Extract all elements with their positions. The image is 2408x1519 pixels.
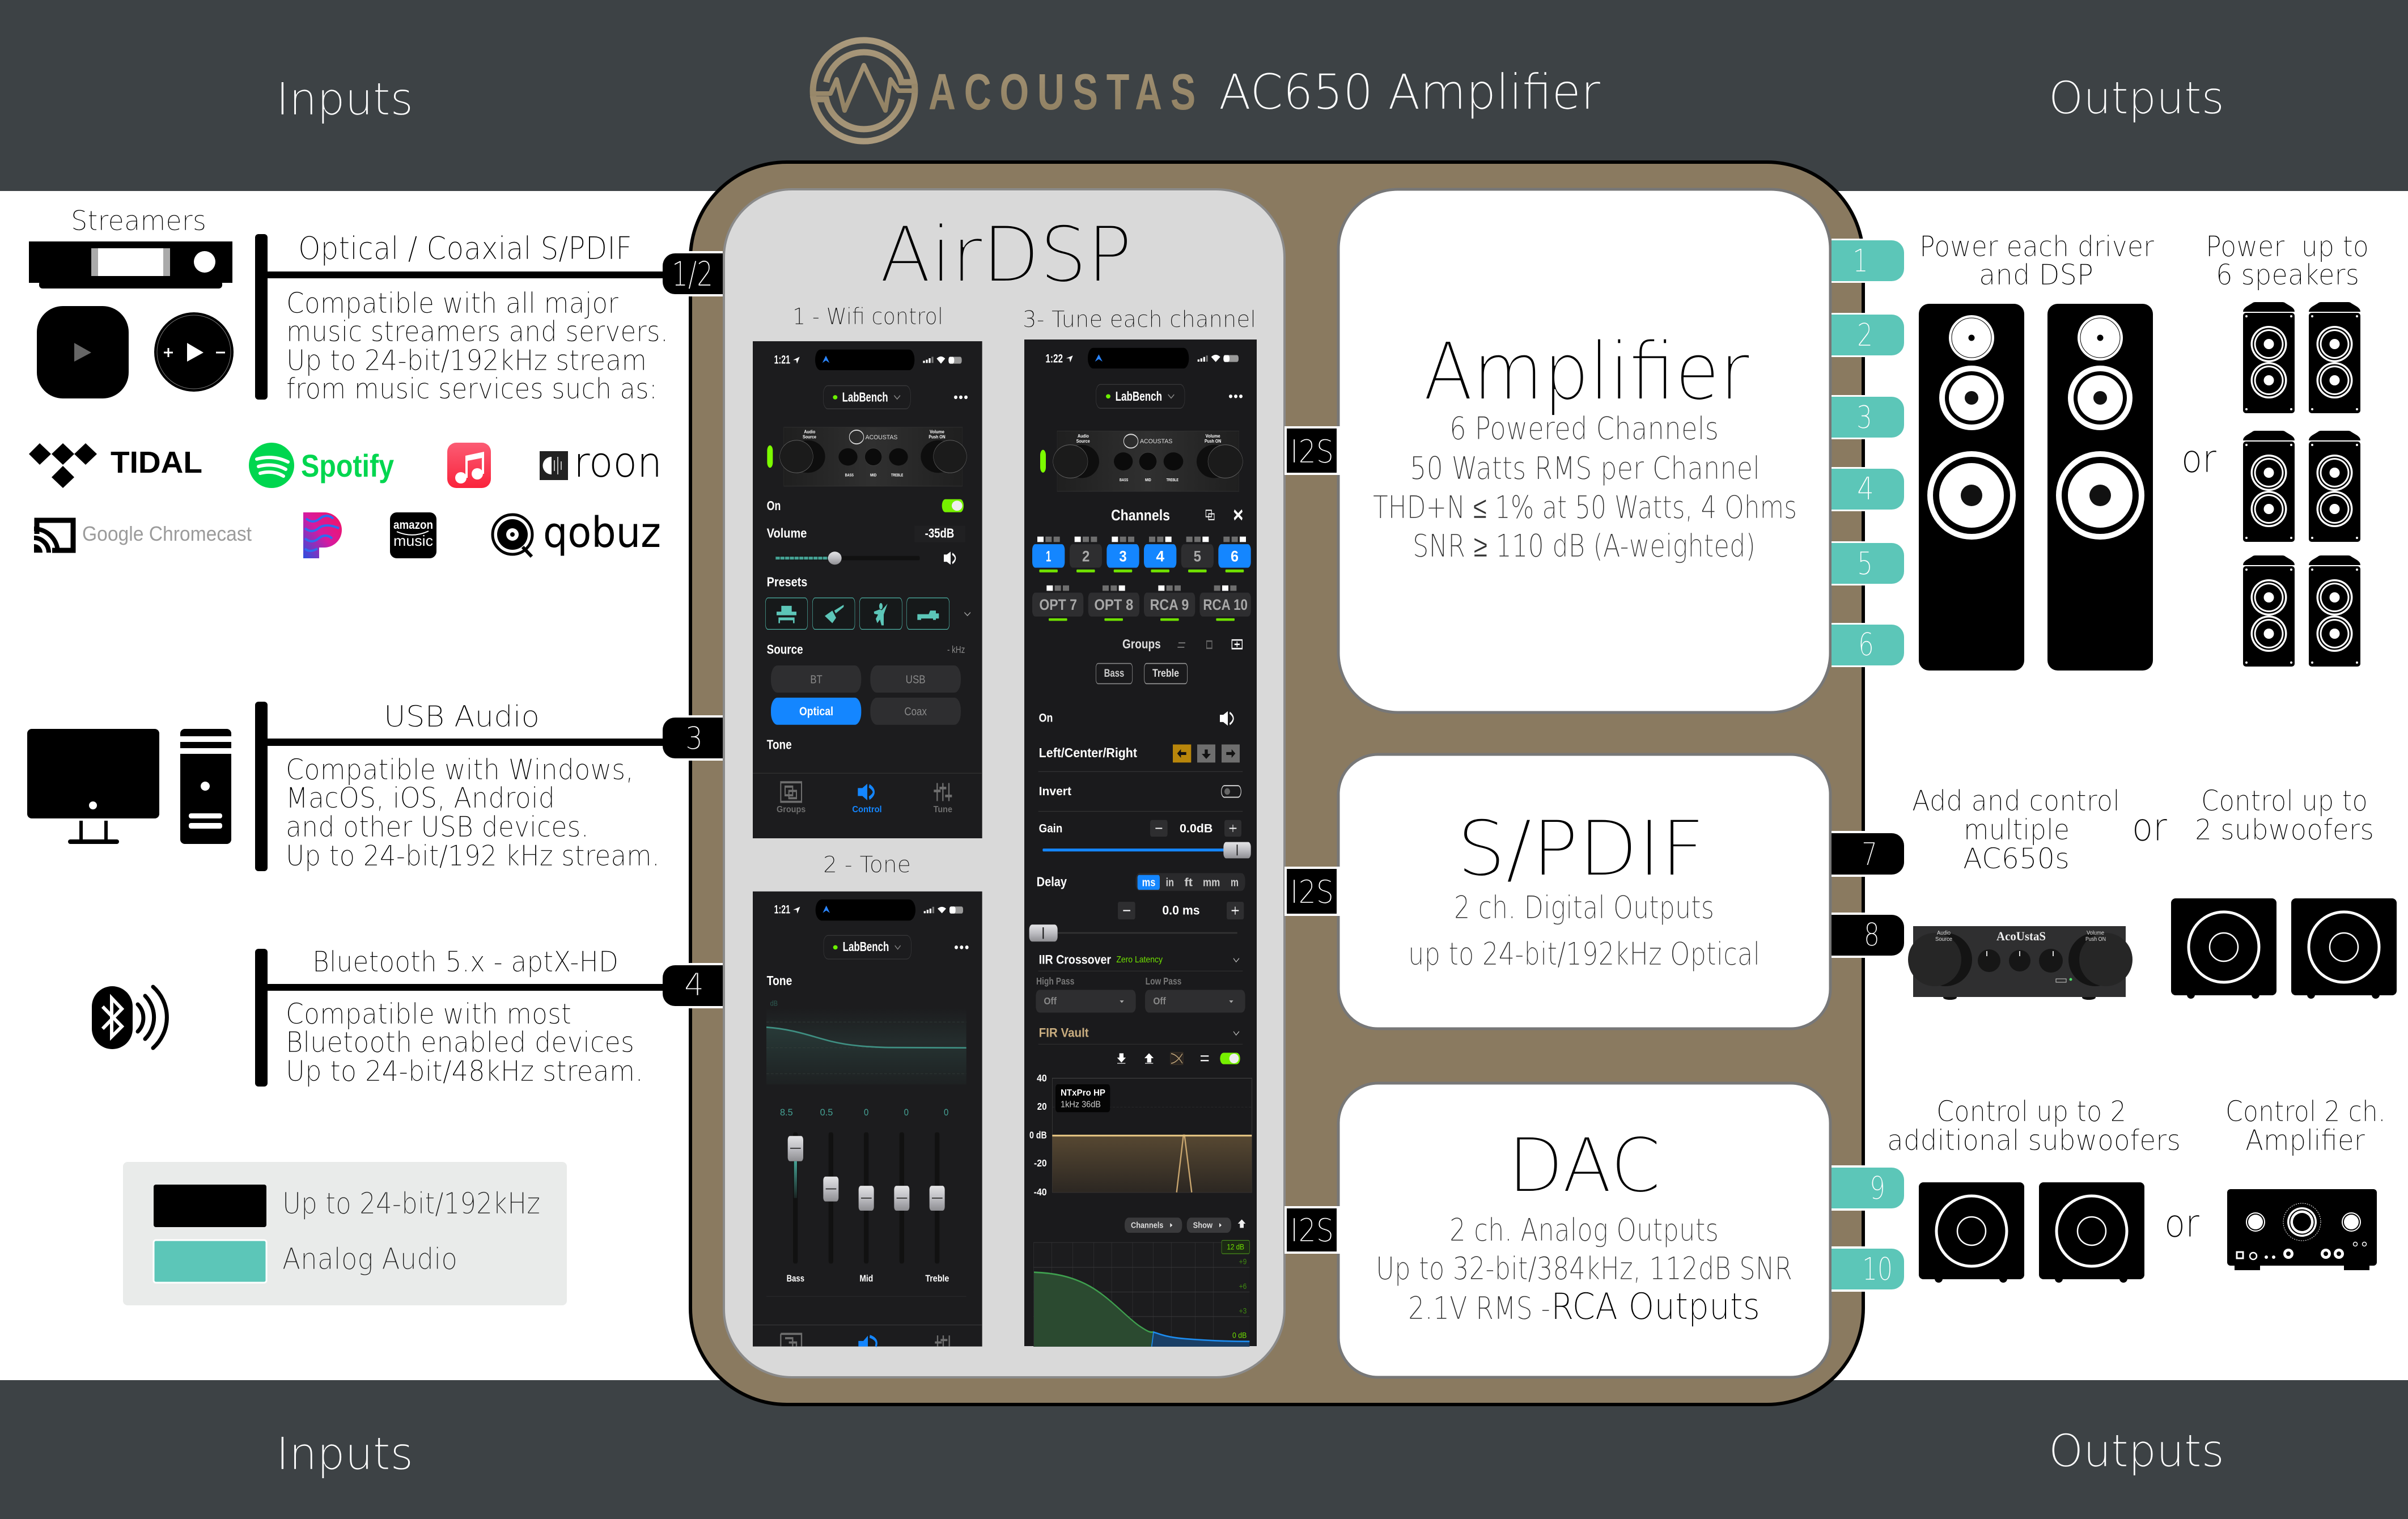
photo: AC650 amplifier front: AcoUstaS [1996, 929, 2046, 943]
phone 3 upper section [1032, 348, 1251, 891]
phone screen 1: wifi control [753, 341, 982, 838]
faders [788, 1132, 945, 1263]
preset buttons [765, 598, 949, 629]
phone 3 upper section: mm [1203, 876, 1220, 889]
spec lines: 2.1V RMS - [1408, 1290, 1550, 1326]
phone 3 upper section: Groups [1122, 637, 1161, 651]
text: or AC650: or [2132, 805, 2167, 850]
title: model name: AC650 Amplifier [1219, 64, 1601, 121]
tone values: 0 [904, 1108, 909, 1118]
FIR response chart: 1kHz 36dB [1061, 1099, 1101, 1109]
title: brand wordmark: ACOUSTAS [929, 64, 1204, 121]
text block: USB description: Up to 24-bit/192 kHz stream. [286, 839, 660, 872]
logo: Google Chromecast [34, 520, 252, 553]
phone screen 2: tone: Bass [787, 1274, 804, 1284]
icon: tower speaker right [2047, 304, 2153, 671]
amp front panel [780, 427, 966, 486]
text block: optical description: Compatible with all major [286, 287, 618, 320]
phone 3 upper section: Channels [1111, 507, 1170, 524]
tab 6 analog output [1832, 623, 1904, 667]
phone 3 upper section: ms [1142, 876, 1155, 889]
logo: Spotify: Spotify [301, 448, 394, 483]
amp front panel: BASS [1120, 478, 1128, 483]
top header bar [0, 0, 2408, 191]
phone screen 2: tone: Mid [859, 1274, 873, 1284]
spec lines: up to 24-bit/192kHz Optical [1408, 936, 1760, 972]
photo: AC650 amplifier front: Volume [2087, 930, 2104, 936]
phone 3 upper section: Invert [1039, 784, 1071, 798]
amp front panel: Audio [804, 430, 815, 435]
phone screen 1: wifi control: Optical [799, 704, 833, 718]
phone 3 lower section: Off [1044, 996, 1057, 1007]
EQ response chart: +3 [1239, 1308, 1247, 1316]
tab bar [777, 782, 952, 814]
text block: USB description: and other USB devices. [286, 811, 589, 843]
icon: network streamer [29, 241, 232, 288]
icon: Bluetooth [92, 986, 167, 1049]
phone screen 1: wifi control: Source [767, 642, 803, 657]
panel: AirDSP [724, 189, 1284, 1377]
phone 3 lower section: Show [1193, 1220, 1213, 1230]
text block: optical description: Up to 24-bit/192kHz stream [286, 344, 647, 377]
tab 10 analog output [1832, 1246, 1904, 1292]
phone screen 2: tone: LabBench [843, 940, 889, 954]
amp front panel: TREBLE [891, 473, 903, 478]
spec lines [1373, 410, 1797, 564]
caption: Wifi control: 1 - Wifi control [792, 304, 943, 330]
channel buttons: OPT 7 [1039, 596, 1077, 613]
phone 3 lower section: Channels [1131, 1220, 1163, 1230]
caption: Add and control: Add and control [1912, 784, 2120, 817]
amp front panel: MID [870, 473, 877, 478]
icon: tower speaker left [1919, 304, 2024, 671]
phone screen 2: tone [753, 892, 982, 1347]
phone screen 2: tone: Treble [925, 1274, 949, 1284]
amp front panel: Push ON [929, 435, 946, 440]
icon group: subwoofers top [2171, 898, 2397, 999]
phone screen 1: wifi control: Tone [767, 737, 792, 752]
FIR response chart: -20 [1034, 1159, 1047, 1169]
heading: AirDSP: AirDSP [880, 210, 1132, 299]
caption: Control up to 2 subwoofers [2195, 784, 2374, 846]
caption: Power each driver: and DSP [1979, 258, 2093, 291]
caption: Power up to 6 speakers: 6 speakers [2216, 258, 2359, 291]
badge: I2S DAC [1284, 1206, 1340, 1254]
heading: Streamers: Streamers [71, 205, 206, 237]
photo: AC650 amplifier front [1908, 926, 2133, 1000]
phone 3 upper section: Treble [1152, 668, 1179, 680]
caption: Control up to 2 additional subwoofers: additional subwoofers [1887, 1124, 2181, 1157]
logo: Tidal [29, 443, 202, 488]
text block: Bluetooth description: Bluetooth enabled devices [286, 1026, 634, 1059]
tab 2 analog output: 2 [1857, 317, 1873, 353]
tone values: 0 [944, 1108, 948, 1118]
connector: optical/coaxial: 1/2 [672, 254, 713, 294]
EQ response chart: +6 [1239, 1283, 1247, 1291]
legend [123, 1162, 567, 1305]
caption: Control 2 ch. Amplifier: Amplifier [2245, 1124, 2365, 1157]
caption: Add and control: multiple [1964, 813, 2070, 846]
phone 3 lower section: FIR Vault [1039, 1025, 1089, 1039]
phone 3 upper section: Gain [1039, 821, 1062, 835]
spec lines: SNR ≥ 110 dB (A-weighted) [1413, 528, 1756, 564]
heading: Outputs top: Outputs [2049, 73, 2224, 124]
heading: Inputs top: Inputs [276, 74, 413, 125]
phone screen 1: wifi control: 1:21 [774, 353, 790, 367]
text block: optical description: music streamers and servers. [286, 315, 668, 348]
amp front panel [1053, 431, 1243, 491]
FIR response chart: 40 [1037, 1074, 1047, 1084]
tab bar: Tune [934, 804, 952, 814]
phone 3 upper section: Bass [1104, 668, 1124, 680]
spec lines: Up to 32-bit/384kHz, 112dB SNR [1376, 1250, 1792, 1287]
connector: optical/coaxial [255, 234, 723, 400]
caption: Tune each channel: 3- Tune each channel [1023, 307, 1256, 333]
phone 3 upper section: Left/Center/Right [1039, 745, 1137, 760]
logo: Google Chromecast: Google Chromecast [82, 522, 252, 545]
FIR response chart: 0 dB [1029, 1130, 1047, 1141]
text block: USB description: Compatible with Windows, [286, 753, 634, 786]
tab 8 digital output [1832, 913, 1904, 958]
phone 3 lower section: Zero Latency [1116, 954, 1163, 965]
phone 3 lower section: High Pass [1036, 976, 1074, 987]
phone screen 1: wifi control: -35dB [925, 525, 954, 540]
spec lines [1408, 889, 1760, 972]
caption: Control up to 2 additional subwoofers: Control up to 2 [1936, 1095, 2126, 1128]
text block: Bluetooth description: Up to 24-bit/48kHz stream. [286, 1055, 643, 1088]
text block: USB description [286, 753, 660, 872]
badge: I2S amplifier [1284, 426, 1340, 475]
amp front panel: TREBLE [1167, 478, 1178, 483]
tone values [780, 1108, 948, 1118]
EQ response chart: 0 dB [1232, 1332, 1247, 1340]
icon: round remote [154, 312, 234, 392]
logo: Spotify [249, 443, 394, 488]
tab 10 analog output: 10 [1862, 1251, 1893, 1287]
tab 7 digital output [1832, 831, 1904, 877]
EQ response chart [1033, 1240, 1249, 1347]
tab 9 analog output: 9 [1869, 1170, 1885, 1206]
phone 3 upper section: 1:22 [1045, 351, 1063, 365]
icon group: subwoofers bottom [1919, 1182, 2144, 1283]
spec lines: 50 Watts RMS per Channel [1410, 450, 1760, 486]
tab 4 analog output [1832, 467, 1904, 511]
tone curve chart: dB [770, 1000, 778, 1008]
FIR response chart: 20 [1037, 1102, 1047, 1113]
caption: Add and control: AC650s [1963, 842, 2070, 875]
tone values: 0.5 [820, 1108, 833, 1118]
caption: Power each driver [1919, 230, 2154, 291]
phone 3 lower section: IIR Crossover [1039, 952, 1111, 966]
amp front panel: Audio [1078, 434, 1089, 439]
logo: Amazon Music [390, 512, 436, 558]
logo: Roon [540, 439, 662, 487]
tab bar: Control [852, 804, 882, 814]
tab 2 analog output [1832, 313, 1904, 357]
tab 1 analog output [1832, 239, 1904, 283]
amp front panel: Source [1076, 439, 1090, 444]
amplifier body [690, 162, 1863, 1405]
phone 3 lower section: 0.0 ms [1162, 903, 1200, 917]
channel buttons: RCA 9 [1150, 596, 1189, 613]
phone 3 upper section: ft [1184, 876, 1193, 889]
caption: Control 2 ch. Amplifier [2225, 1095, 2386, 1157]
spec lines: 2 ch. Digital Outputs [1454, 889, 1714, 926]
tab 1 analog output: 1 [1852, 243, 1868, 279]
channel buttons: 5 [1194, 548, 1201, 565]
legend label: digital: Up to 24-bit/192kHz [282, 1187, 540, 1221]
EQ response chart: 12 dB [1227, 1244, 1244, 1251]
legend label: analog: Analog Audio [282, 1242, 457, 1276]
photo: AC650 amplifier front: Audio [1937, 930, 1951, 936]
amp front panel: Volume [930, 430, 944, 435]
logo: Roon: roon [574, 439, 662, 487]
channel buttons: RCA 10 [1203, 596, 1248, 613]
caption: Tone: 2 - Tone [823, 852, 911, 878]
badge: I2S S/PDIF: I2S [1290, 874, 1334, 911]
tab 3 analog output [1832, 395, 1904, 439]
text block: optical description [286, 287, 668, 405]
photo: AC650 amplifier front: Source [1935, 936, 1952, 943]
logo: Apple Music [447, 443, 491, 488]
phone 3 upper section: m [1231, 876, 1239, 889]
bottom footer bar [0, 1380, 2408, 1519]
tab 5 analog output: 5 [1857, 545, 1873, 582]
heading: Outputs bottom: Outputs [2049, 1426, 2224, 1477]
FIR response chart [1029, 1074, 1252, 1198]
phone 3 lower section: Off [1153, 996, 1166, 1007]
phone screen 1: wifi control: - kHz [947, 644, 965, 656]
badge: I2S S/PDIF [1284, 867, 1340, 916]
text: or speakers: or [2181, 437, 2216, 482]
channel buttons: 3 [1119, 548, 1127, 565]
spec lines [1376, 1212, 1792, 1328]
heading: DAC: DAC [1508, 1122, 1661, 1210]
caption: Control 2 ch. Amplifier: Control 2 ch. [2225, 1095, 2386, 1128]
legend swatch: digital [154, 1185, 266, 1227]
clipped tab bar icons [781, 1334, 802, 1347]
FIR toolbar icons [1117, 1052, 1240, 1065]
caption: Control up to 2 subwoofers: Control up to [2201, 784, 2368, 817]
spec lines: 2 ch. Analog Outputs [1449, 1212, 1719, 1248]
spec lines: THD+N ≤ 1% at 50 Watts, 4 Ohms [1373, 489, 1797, 525]
badge: I2S amplifier: I2S [1290, 434, 1334, 470]
tab 9 analog output [1832, 1165, 1904, 1211]
tab 5 analog output [1832, 541, 1904, 585]
logo: Amazon Music: music [393, 532, 433, 549]
heading: Inputs bottom: Inputs [276, 1429, 413, 1480]
spec lines: 6 Powered Channels [1449, 410, 1719, 447]
tab 6 analog output: 6 [1858, 626, 1874, 663]
heading: Optical / Coaxial: Optical / Coaxial S/PDIF [298, 230, 632, 266]
tone values: 8.5 [780, 1108, 793, 1118]
text block: Bluetooth description [286, 998, 643, 1088]
connector: Bluetooth: 4 [684, 967, 704, 1003]
connector: USB: 3 [685, 720, 703, 756]
phone 3 upper section: Delay [1037, 874, 1067, 889]
caption: Control up to 2 additional subwoofers [1887, 1095, 2181, 1157]
icon group: six small speakers [2243, 302, 2360, 667]
phone screen 1: wifi control: Presets [767, 574, 807, 589]
channel buttons [1032, 537, 1251, 621]
icon: computer monitor [27, 729, 159, 844]
phone screen 1: wifi control: LabBench [842, 389, 888, 405]
caption: Power up to 6 speakers [2206, 230, 2369, 291]
logo: Acoustas emblem [811, 40, 917, 141]
caption: Control up to 2 subwoofers: 2 subwoofers [2195, 813, 2374, 846]
phone 3 lower section: Low Pass [1146, 976, 1181, 987]
amp front panel: BASS [845, 473, 854, 478]
tab bar: Groups [777, 804, 806, 814]
caption: Add and control [1912, 784, 2120, 875]
amp front panel: ACOUSTAS [1140, 438, 1172, 445]
amp front panel: ACOUSTAS [866, 434, 897, 440]
tone values: 0 [864, 1108, 868, 1118]
text block: optical description: from music services such as: [286, 372, 658, 405]
icon: stereo amplifier [2227, 1189, 2377, 1270]
caption: Power each driver: Power each driver [1919, 230, 2154, 263]
phone screen 1: wifi control: On [767, 498, 781, 513]
amp front panel: Push ON [1205, 439, 1222, 444]
phone screen 1: wifi control: USB [906, 673, 926, 686]
text block: Bluetooth description: Compatible with most [286, 998, 571, 1030]
tab 3 analog output: 3 [1856, 399, 1872, 435]
amp front panel: Source [803, 435, 816, 440]
channel buttons: OPT 8 [1094, 596, 1133, 613]
badge: I2S DAC: I2S [1290, 1212, 1334, 1249]
text block: USB description: MacOS, iOS, Android [286, 782, 555, 814]
tab 4 analog output: 4 [1857, 470, 1874, 507]
amp front panel: MID [1145, 478, 1151, 483]
phone screen 2: tone: 1:21 [774, 902, 790, 916]
logo: Qobuz: qobuz [543, 508, 661, 557]
channel buttons: 6 [1231, 548, 1239, 565]
FIR response chart: -40 [1034, 1187, 1047, 1198]
phone screen 1: wifi control: BT [810, 673, 823, 686]
phone 3 upper section: 0.0dB [1180, 821, 1213, 835]
tab 7 digital output: 7 [1862, 836, 1877, 872]
channel buttons: 4 [1156, 548, 1164, 565]
phone 3 upper section: On [1039, 710, 1053, 724]
FIR response chart: NTxPro HP [1061, 1087, 1105, 1097]
panel: DAC [1338, 1083, 1830, 1377]
logo: Qobuz [493, 508, 661, 557]
heading: S/PDIF: S/PDIF [1457, 804, 1705, 893]
phone screen 3: tune each channel [1024, 340, 1257, 1347]
photo: AC650 amplifier front: Push ON [2085, 936, 2106, 943]
EQ response chart: +9 [1239, 1258, 1247, 1266]
phone 3 upper section: in [1166, 876, 1174, 889]
panel: Amplifier [1338, 189, 1830, 712]
connector: Bluetooth [255, 949, 723, 1087]
amp front panel: Volume [1206, 434, 1220, 439]
logo: Amazon Music: amazon [393, 519, 433, 532]
icon: desktop tower [180, 729, 231, 844]
heading: Bluetooth: Bluetooth 5.x - aptX-HD [312, 945, 618, 978]
logo: Pandora [303, 512, 342, 558]
phone screen 2: tone: Tone [767, 974, 792, 988]
heading: USB Audio: USB Audio [384, 700, 540, 734]
legend swatch: analog [154, 1240, 266, 1283]
text: or amplifier: or [2164, 1202, 2199, 1246]
phone 3 lower section [1029, 902, 1252, 1347]
tab 8 digital output: 8 [1864, 917, 1880, 953]
logo: Tidal: TIDAL [111, 445, 202, 480]
icon: streaming box [37, 306, 129, 398]
connector: USB [255, 702, 723, 871]
phone screen 1: wifi control: Volume [767, 525, 807, 540]
tone curve chart [766, 1000, 966, 1084]
channel buttons: 1 [1046, 548, 1051, 565]
spec lines: RCA Outputs [1551, 1286, 1760, 1328]
phone screen 1: wifi control: Coax [904, 706, 927, 718]
channel buttons: 2 [1082, 548, 1089, 565]
heading: Amplifier: Amplifier [1423, 326, 1749, 418]
phone 3 upper section: LabBench [1116, 389, 1162, 404]
panel: S/PDIF [1338, 754, 1830, 1029]
caption: Power up to 6 speakers: Power up to [2206, 230, 2369, 263]
